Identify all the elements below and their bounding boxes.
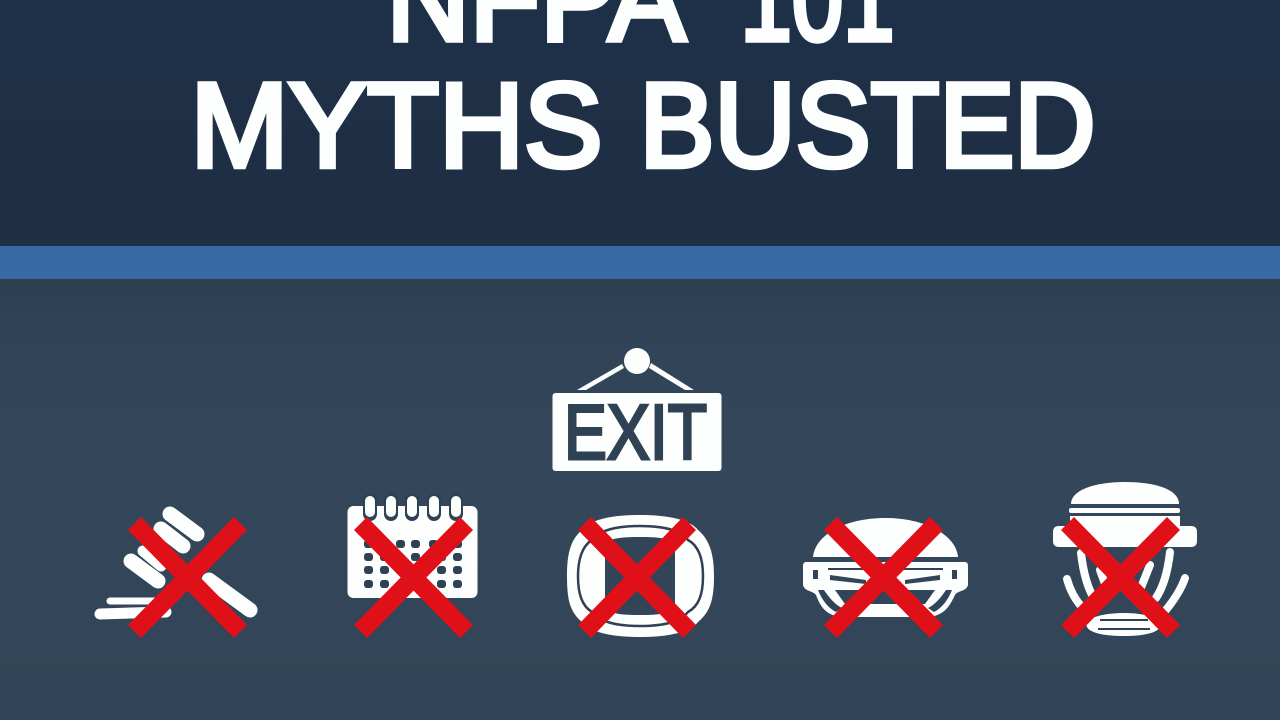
smoke detector red cross [824,517,943,638]
panel: header background [0,0,1280,246]
calendar red cross [354,517,473,638]
icon: hanging exit sign: EXIT [564,388,707,476]
icon: crossed-out calendar [348,500,478,638]
panel: lower background [0,279,1280,720]
sprinkler red cross [1061,517,1180,638]
ring device red cross [578,517,696,638]
title: BUSTED [640,58,1096,192]
title [190,0,1096,192]
icon: crossed-out smoke detector [803,517,968,638]
gavel red cross [128,517,247,638]
icon: crossed-out sprinkler head [1053,482,1197,638]
icon: crossed-out gavel [100,514,250,638]
icon: hanging exit sign [552,348,722,476]
icon: crossed-out rounded ring device [567,515,714,638]
blue divider band [0,246,1280,279]
title: MYTHS [190,58,602,192]
